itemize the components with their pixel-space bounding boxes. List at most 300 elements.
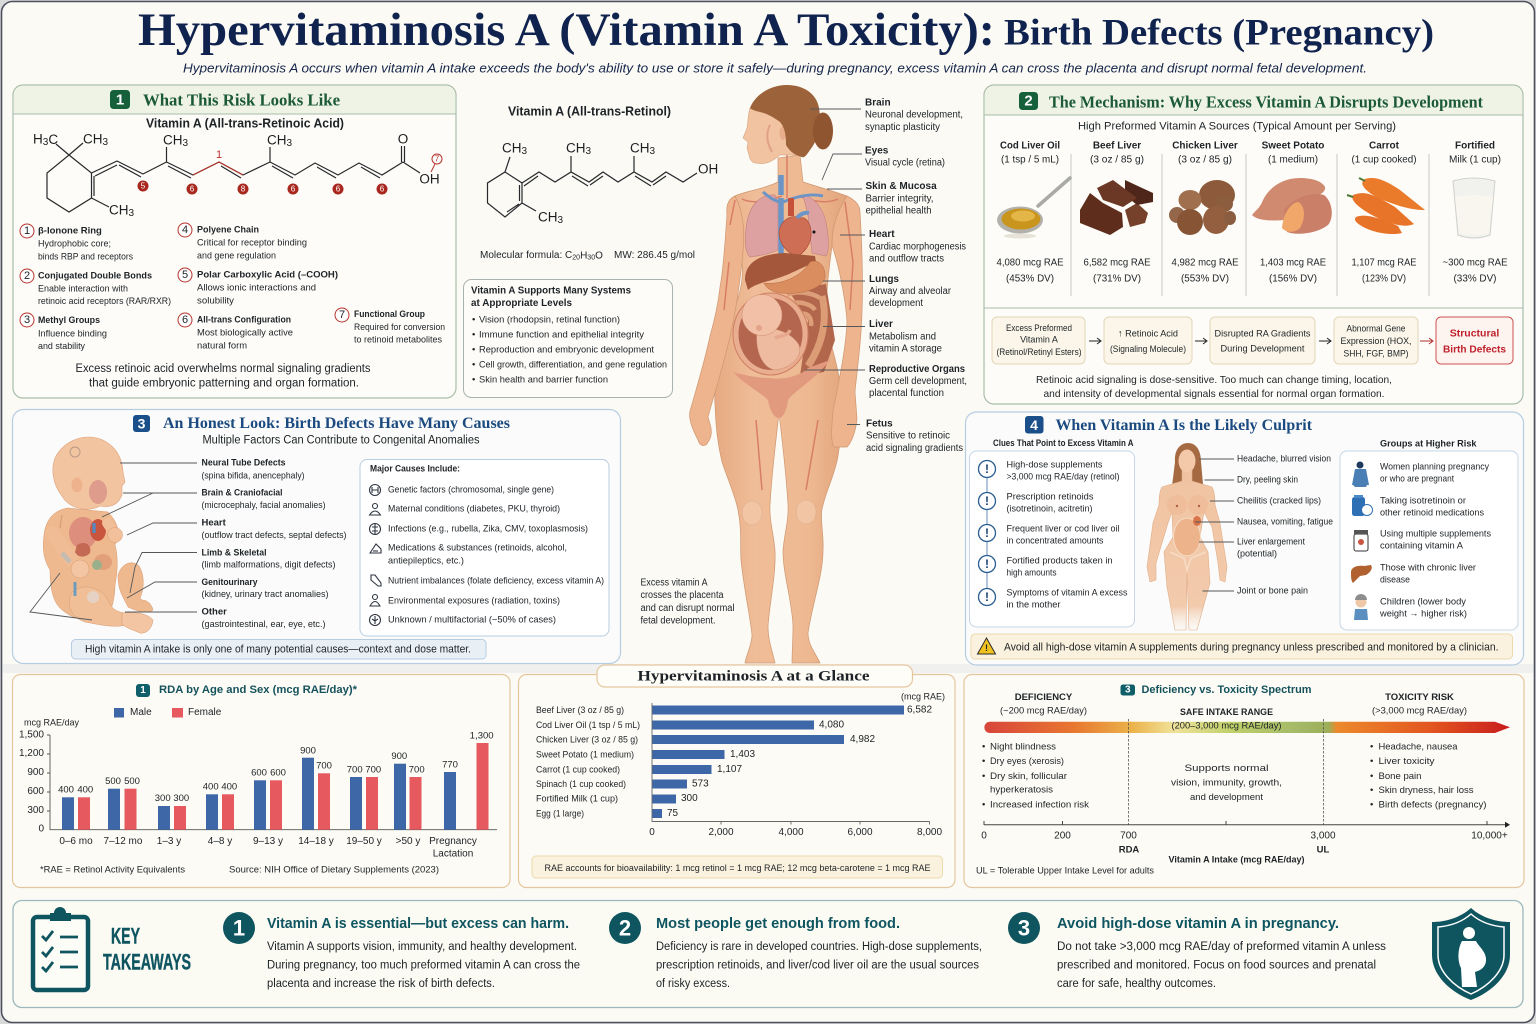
key item 1: Hydrophobic core; bbox=[38, 238, 111, 250]
food: beef liver: 6,582 mcg RAE bbox=[1084, 258, 1151, 268]
label: brain and craniofacial: (microcephaly, facial anomalies) bbox=[202, 500, 326, 511]
panel 3: birth defects have many causes bbox=[12, 410, 620, 664]
key item 5: solubility bbox=[197, 296, 234, 306]
key takeaways label: TAKEAWAYS bbox=[103, 950, 191, 974]
bar value labels: 400 bbox=[221, 782, 237, 792]
retinol structure: OH bbox=[698, 162, 718, 176]
panel: RDA by age and sex chart bbox=[12, 674, 510, 888]
heading: what this risk looks like: What This Risk Looks Like bbox=[143, 90, 340, 110]
label: lungs bbox=[869, 274, 952, 309]
food: carrot: Carrot bbox=[1369, 140, 1400, 152]
food: beef liver: Beef Liver bbox=[1093, 140, 1141, 152]
retinol structure: 3 bbox=[558, 214, 564, 226]
food: chicken liver: (553% DV) bbox=[1181, 274, 1229, 284]
glance axis: 8,000 bbox=[917, 827, 942, 838]
major causes box bbox=[360, 460, 609, 636]
toxicity symptoms: • bbox=[1370, 771, 1373, 782]
food bar values: 1,403 bbox=[730, 749, 755, 760]
flow step 1: Vitamin A bbox=[1020, 334, 1058, 344]
mechanism summary bbox=[1036, 374, 1392, 400]
major causes box: Unknown / multifactorial (~50% of cases) bbox=[388, 614, 556, 626]
glance axis: 4,000 bbox=[778, 827, 804, 838]
panel 4: when vitamin A is the likely culprit bbox=[966, 412, 1524, 665]
badge 1: 1 bbox=[116, 92, 124, 108]
food bar labels: Spinach (1 cup cooked) bbox=[536, 779, 626, 789]
label: heart: Heart bbox=[869, 229, 895, 240]
takeaway 3: prescribed and monitored. Focus on food sources and prenatal bbox=[1057, 960, 1376, 972]
clues box bbox=[970, 451, 1134, 627]
label: neural tube defects: (spina bifida, anencephaly) bbox=[202, 470, 304, 482]
food bar values: 1,107 bbox=[717, 764, 742, 775]
symptom labels bbox=[1237, 454, 1333, 596]
takeaway 3: care for safe, healthy outcomes. bbox=[1057, 978, 1216, 990]
food bar labels: Sweet Potato (1 medium) bbox=[536, 750, 634, 760]
placenta note: fetal development. bbox=[640, 616, 716, 626]
group: women planning pregnancy: or who are pregnant bbox=[1380, 474, 1454, 484]
safe range description: vision, immunity, growth, bbox=[1171, 778, 1282, 788]
key item 5: 5 bbox=[182, 269, 188, 281]
key item 1: β-Ionone Ring bbox=[38, 226, 102, 236]
food: chicken liver: 4,982 mcg RAE bbox=[1172, 258, 1239, 268]
neck and shoulder vessels bbox=[724, 155, 853, 490]
RDA badge bbox=[136, 684, 150, 697]
key item 3: Methyl Groups bbox=[38, 315, 100, 326]
major causes box: Infections (e.g., rubella, Zika, CMV, toxoplasmosis) bbox=[388, 524, 588, 534]
label: heart: Cardiac morphogenesis bbox=[869, 242, 966, 252]
intake axis: UL bbox=[1317, 844, 1330, 856]
knees bbox=[742, 500, 816, 525]
group: chronic liver disease bbox=[1351, 562, 1476, 586]
food: cod liver oil: (1 tsp / 5 mL) bbox=[1001, 154, 1059, 166]
molecule title: Vitamin A (All-trans-Retinoic Acid) bbox=[146, 116, 344, 130]
group: children bbox=[1354, 594, 1467, 620]
placenta note bbox=[640, 578, 734, 626]
y axis: 900 bbox=[27, 767, 44, 778]
intake axis: 700 bbox=[1120, 830, 1137, 842]
retinoic acid structure: 6 bbox=[190, 184, 195, 194]
food sources subtitle: High Preformed Vitamin A Sources (Typical Amount per Serving) bbox=[1078, 120, 1396, 132]
deficiency symptoms: • bbox=[982, 800, 985, 810]
bar value labels: 700 bbox=[365, 764, 381, 776]
toxicity symptoms: • bbox=[1370, 756, 1373, 767]
key item 4: Polyene Chain bbox=[197, 224, 259, 236]
anatomy leader lines bbox=[805, 109, 865, 424]
label: heart: (outflow tract defects, septal defects) bbox=[202, 530, 346, 541]
food bar labels: Fortified Milk (1 cup) bbox=[536, 794, 618, 804]
food bar values: 573 bbox=[692, 778, 709, 790]
label: liver: vitamin A storage bbox=[869, 344, 942, 354]
food: chicken liver: Chicken Liver bbox=[1172, 140, 1238, 152]
label: brain: Brain bbox=[865, 98, 891, 108]
key item 7 bbox=[335, 308, 445, 346]
glance axis: 6,000 bbox=[847, 827, 873, 838]
food: fortified milk: ~300 mcg RAE bbox=[1442, 258, 1508, 268]
food: fortified milk: Milk (1 cup) bbox=[1449, 154, 1501, 166]
mechanism summary: and intensity of developmental signals essential for normal organ formation. bbox=[1044, 388, 1384, 400]
flow step 4: SHH, FGF, BMP) bbox=[1344, 348, 1408, 360]
key takeaways label bbox=[103, 924, 191, 974]
left arm bbox=[690, 196, 744, 446]
y axis: mcg RAE/day bbox=[24, 718, 80, 728]
label: genitourinary bbox=[202, 577, 328, 600]
deficiency symptoms: hyperkeratosis bbox=[990, 784, 1053, 796]
clue 4 bbox=[978, 556, 1112, 578]
food: carrot: (123% DV) bbox=[1362, 274, 1406, 284]
badge 1 bbox=[110, 90, 130, 109]
key item 4 bbox=[178, 223, 307, 262]
clue 4: high amounts bbox=[1006, 568, 1057, 578]
retinoic acid structure: CH bbox=[83, 132, 102, 146]
retinoic acid structure: CH bbox=[163, 132, 182, 148]
deficiency symptoms: • bbox=[982, 742, 985, 752]
uterus bbox=[733, 293, 808, 375]
deficiency symptoms: • bbox=[982, 771, 985, 782]
category labels: 4–8 y bbox=[208, 836, 232, 847]
key item 2 bbox=[20, 269, 171, 307]
safe range heading: SAFE INTAKE RANGE bbox=[1180, 707, 1273, 718]
toxicity symptoms: Bone pain bbox=[1378, 771, 1422, 782]
food: cod liver oil: (453% DV) bbox=[1006, 274, 1054, 284]
label: eyes bbox=[865, 146, 945, 168]
symptom labels: Headache, blurred vision bbox=[1237, 454, 1331, 464]
supports many systems box: • bbox=[472, 374, 475, 386]
major causes box: Genetic factors (chromosomal, single gene) bbox=[388, 484, 554, 496]
clue 5: in the mother bbox=[1006, 600, 1060, 610]
flow step 1 bbox=[992, 317, 1085, 364]
group: children: Children (lower body bbox=[1380, 596, 1466, 608]
glance axis: 0 bbox=[649, 827, 655, 838]
label: other: (gastrointestinal, ear, eye, etc.) bbox=[202, 619, 326, 630]
key item 6: natural form bbox=[197, 340, 247, 352]
label: liver: Metabolism and bbox=[869, 332, 936, 342]
key item 3: 3 bbox=[24, 314, 30, 326]
intake axis: RDA bbox=[1119, 844, 1139, 856]
group: multiple supplements: containing vitamin A bbox=[1380, 540, 1464, 552]
clues heading: Clues That Point to Excess Vitamin A bbox=[993, 438, 1134, 448]
category labels: 7–12 mo bbox=[104, 836, 143, 847]
right arm bbox=[832, 196, 862, 447]
retinoic acid structure: 3 bbox=[43, 136, 49, 148]
food bar labels: Beef Liver (3 oz / 85 g) bbox=[536, 705, 624, 715]
deficiency symptoms: • bbox=[982, 756, 985, 767]
key item 1 bbox=[20, 224, 133, 262]
group: retinoid medications bbox=[1352, 495, 1484, 518]
mechanism summary: Retinoic acid signaling is dose-sensitive. Too much can change timing, location, bbox=[1036, 374, 1392, 386]
group: chronic liver disease: disease bbox=[1380, 574, 1410, 586]
heading: likely culprit: When Vitamin A Is the Likely Culprit bbox=[1056, 417, 1313, 434]
flow step 4: Abnormal Gene bbox=[1346, 324, 1406, 334]
molecular formula: MW: 286.45 g/mol bbox=[614, 250, 695, 261]
y axis: 0 bbox=[38, 824, 44, 834]
key item 3: Influence binding bbox=[38, 328, 107, 340]
intake axis: 3,000 bbox=[1310, 830, 1336, 842]
intake axis bbox=[981, 821, 1510, 866]
glance axis: 2,000 bbox=[708, 827, 734, 838]
food bar labels: Carrot (1 cup cooked) bbox=[536, 764, 620, 774]
panel 2: the mechanism bbox=[984, 85, 1523, 404]
bar value labels: 770 bbox=[442, 760, 458, 770]
bar value labels: 300 bbox=[155, 793, 171, 804]
icon: shield with pregnant silhouette bbox=[1432, 908, 1510, 1000]
retinoic acid structure: 8 bbox=[241, 184, 246, 194]
retinoic acid structure: 7 bbox=[435, 154, 440, 164]
symptom labels: Cheilitis (cracked lips) bbox=[1237, 496, 1321, 506]
flow arrow bbox=[1420, 338, 1433, 344]
clue 3: ! bbox=[985, 526, 989, 540]
RDA footnotes: *RAE = Retinol Activity Equivalents bbox=[40, 864, 185, 876]
toxicity heading: (>3,000 mcg RAE/day) bbox=[1372, 706, 1467, 716]
label: fetus: Sensitive to retinoic bbox=[866, 430, 950, 442]
RDA heading: RDA by Age and Sex (mcg RAE/day)* bbox=[159, 684, 358, 696]
molecular formula: O bbox=[595, 250, 603, 261]
bar value labels: 600 bbox=[251, 768, 267, 778]
key item 7: to retinoid metabolites bbox=[354, 334, 442, 346]
group: chronic liver disease: Those with chronic liver bbox=[1380, 562, 1476, 574]
deficiency symptoms: Increased infection risk bbox=[990, 800, 1089, 810]
label: heart bbox=[869, 229, 966, 264]
y axis bbox=[19, 718, 497, 834]
group: children: weight → higher risk) bbox=[1379, 608, 1467, 620]
context callout bbox=[72, 640, 486, 659]
label: brain and craniofacial: Brain & Craniofacial bbox=[202, 488, 282, 498]
retinoic acid structure: CH bbox=[109, 202, 128, 218]
RDA footnotes bbox=[40, 864, 439, 876]
key item 2: Conjugated Double Bonds bbox=[38, 270, 152, 282]
retinoic acid structure: OH bbox=[419, 172, 440, 186]
RAE note: RAE accounts for bioavailability: 1 mcg retinol = 1 mcg RAE; 12 mcg beta-carotene = 1 mcg RAE bbox=[544, 863, 930, 873]
title bbox=[138, 4, 1434, 56]
supports many systems box: • bbox=[472, 344, 475, 356]
retinol structure bbox=[488, 140, 718, 226]
clue 1 bbox=[978, 460, 1120, 482]
label: liver bbox=[869, 319, 942, 354]
safe range description: and development bbox=[1190, 792, 1263, 803]
title: Birth Defects (Pregnancy) bbox=[1004, 12, 1434, 54]
food: carrot bbox=[1347, 140, 1425, 284]
retinoic acid structure: 3 bbox=[286, 138, 292, 148]
safe range description: Supports normal bbox=[1184, 763, 1268, 774]
symptom labels: (potential) bbox=[1237, 548, 1277, 560]
symptom labels: Nausea, vomiting, fatigue bbox=[1237, 516, 1333, 528]
retinoic acid structure bbox=[33, 132, 442, 218]
symptom labels: Liver enlargement bbox=[1237, 536, 1305, 548]
retinol structure: 3 bbox=[522, 146, 528, 156]
spectrum gradient bar: (200–3,000 mcg RAE/day) bbox=[1172, 720, 1282, 732]
bar value labels: 700 bbox=[347, 764, 363, 776]
group: women planning pregnancy bbox=[1352, 462, 1489, 487]
deficiency symptoms bbox=[982, 742, 1089, 810]
label: genitourinary: Genitourinary bbox=[202, 577, 258, 588]
label: brain bbox=[865, 98, 963, 133]
key item 5 bbox=[178, 268, 338, 306]
placenta note: Excess vitamin A bbox=[640, 578, 708, 588]
retinoic acid structure: 6 bbox=[380, 184, 385, 194]
flow arrow bbox=[1195, 338, 1207, 344]
toxicity symptoms: Liver toxicity bbox=[1378, 756, 1435, 767]
deficiency heading bbox=[1000, 692, 1087, 716]
glance title tab bbox=[597, 665, 912, 687]
label: liver: Liver bbox=[869, 319, 893, 330]
heading: honest look: An Honest Look: Birth Defects Have Many Causes bbox=[163, 415, 510, 432]
takeaway 1 bbox=[223, 912, 580, 990]
supports many systems box: • bbox=[472, 360, 475, 370]
spectrum gradient bar bbox=[984, 720, 1510, 733]
badge 3: 3 bbox=[138, 416, 146, 432]
takeaway 3: 3 bbox=[1018, 916, 1030, 940]
flow step 3: Disrupted RA Gradients bbox=[1214, 328, 1311, 340]
clue 1: ! bbox=[985, 462, 989, 476]
retinol structure: 3 bbox=[586, 146, 592, 156]
label: lungs: Airway and alveolar bbox=[869, 286, 952, 297]
clue 4: Fortified products taken in bbox=[1006, 556, 1112, 566]
spectrum badge: 3 bbox=[1125, 684, 1131, 696]
spectrum heading: Deficiency vs. Toxicity Spectrum bbox=[1142, 684, 1312, 696]
intake axis: 0 bbox=[981, 830, 987, 842]
symptom labels: Dry, peeling skin bbox=[1237, 474, 1298, 486]
label: brain: Neuronal development, bbox=[865, 110, 963, 120]
major causes box: Maternal conditions (diabetes, PKU, thyroid) bbox=[388, 504, 560, 514]
food bar values: 300 bbox=[681, 793, 698, 804]
retinoic acid structure: 1 bbox=[216, 149, 222, 161]
supports many systems box: Immune function and epithelial integrity bbox=[479, 330, 644, 340]
badge 4: 4 bbox=[1030, 417, 1038, 433]
food bar values: 75 bbox=[667, 808, 679, 819]
toxicity symptoms: • bbox=[1370, 742, 1373, 752]
liver bbox=[745, 253, 816, 290]
food: carrot: 1,107 mcg RAE bbox=[1352, 258, 1417, 268]
key item 4: 4 bbox=[182, 224, 188, 236]
food: sweet potato: 1,403 mcg RAE bbox=[1260, 258, 1326, 268]
molecular formula: H bbox=[580, 250, 587, 261]
flow step 4 bbox=[1334, 317, 1418, 364]
label: neural tube defects: Neural Tube Defects bbox=[202, 458, 286, 468]
major causes box: Nutrient imbalances (folate deficiency, excess vitamin A) bbox=[388, 576, 604, 586]
label: lungs: development bbox=[869, 298, 923, 309]
label: other: Other bbox=[202, 606, 227, 618]
toxicity symptoms: Birth defects (pregnancy) bbox=[1378, 800, 1486, 810]
retinoic acid structure: 3 bbox=[102, 136, 108, 148]
flow arrow bbox=[1089, 338, 1101, 344]
food: sweet potato: (1 medium) bbox=[1268, 154, 1318, 166]
retinoic acid structure: O bbox=[398, 132, 408, 146]
category labels: 14–18 y bbox=[298, 836, 334, 847]
pelvis and reproductive organs bbox=[733, 360, 830, 418]
category labels: 1–3 y bbox=[157, 836, 181, 847]
key item 6 bbox=[178, 313, 293, 352]
UL footnote: UL = Tolerable Upper Intake Level for adults bbox=[976, 866, 1154, 876]
food bar labels: Chicken Liver (3 oz / 85 g) bbox=[536, 734, 638, 744]
clue 5 bbox=[978, 588, 1128, 610]
panel: key takeaways bbox=[13, 900, 1523, 1008]
symptom leader lines bbox=[1195, 459, 1234, 591]
intake axis: 10,000+ bbox=[1471, 830, 1508, 842]
molecular formula: 20 bbox=[572, 254, 580, 261]
flow step 2 bbox=[1104, 317, 1192, 364]
group: retinoid medications: Taking isotretinoin or bbox=[1380, 496, 1466, 506]
clue 5: ! bbox=[985, 590, 989, 604]
toxicity heading bbox=[1372, 692, 1467, 716]
groups heading: Groups at Higher Risk bbox=[1380, 438, 1477, 450]
icon: clipboard checklist bbox=[33, 907, 88, 990]
retinol structure: CH bbox=[502, 140, 522, 156]
food: sweet potato: Sweet Potato bbox=[1262, 140, 1324, 152]
major causes box: Major Causes Include: bbox=[370, 464, 460, 474]
retinol molecule block bbox=[464, 104, 718, 398]
RDA legend: Female bbox=[188, 707, 222, 718]
food: fortified milk bbox=[1442, 140, 1508, 284]
clue 1: High-dose supplements bbox=[1006, 460, 1103, 470]
takeaway 2 bbox=[609, 912, 982, 990]
central pregnant woman anatomy figure bbox=[690, 85, 862, 663]
food: beef liver: (731% DV) bbox=[1093, 274, 1141, 284]
takeaway 3: Avoid high-dose vitamin A in pregnancy. bbox=[1057, 915, 1339, 932]
label: limb and skeletal: Limb & Skeletal bbox=[202, 548, 266, 558]
key item 7: Required for conversion bbox=[354, 322, 445, 333]
bar value labels: 500 bbox=[105, 776, 121, 787]
deficiency heading: (~200 mcg RAE/day) bbox=[1000, 706, 1087, 716]
panel 1 summary bbox=[76, 363, 371, 390]
intestines bbox=[787, 284, 835, 376]
y axis: 600 bbox=[27, 786, 44, 797]
toxicity symptoms: • bbox=[1370, 785, 1373, 796]
retinoic acid structure: 3 bbox=[182, 138, 188, 148]
takeaway 1: During pregnancy, too much preformed vitamin A can cross the bbox=[267, 960, 580, 972]
RDA legend: Male bbox=[130, 707, 152, 718]
key item 2: 2 bbox=[24, 270, 30, 282]
retinoic acid structure: CH bbox=[267, 132, 286, 148]
clue 4: ! bbox=[985, 557, 989, 571]
key item 6: Most biologically active bbox=[197, 328, 293, 338]
placenta note: and can disrupt normal bbox=[640, 603, 734, 614]
intake axis: Vitamin A Intake (mcg RAE/day) bbox=[1168, 854, 1304, 866]
retinol structure: CH bbox=[630, 140, 650, 156]
deficiency symptoms: Night blindness bbox=[990, 742, 1056, 752]
female bars bbox=[78, 743, 488, 830]
takeaway 1: Vitamin A supports vision, immunity, and healthy development. bbox=[267, 941, 577, 953]
category labels bbox=[59, 836, 477, 860]
key item 7: 7 bbox=[339, 309, 345, 321]
baby leader lines bbox=[30, 463, 197, 620]
flow step 1: Excess Preformed bbox=[1006, 323, 1072, 333]
panel 1: what this risk looks like bbox=[13, 85, 456, 398]
y axis: 300 bbox=[27, 805, 44, 816]
group: retinoid medications: other retinoid medications bbox=[1380, 508, 1484, 518]
molecular formula: 30 bbox=[587, 254, 595, 261]
baby illustration with organ anatomy bbox=[43, 430, 153, 633]
key item 5: Allows ionic interactions and bbox=[197, 282, 316, 294]
food: chicken liver: (3 oz / 85 g) bbox=[1178, 154, 1232, 166]
label: fetus: acid signaling gradients bbox=[866, 443, 963, 454]
label: fetus: Fetus bbox=[866, 418, 893, 430]
RDA badge: 1 bbox=[140, 685, 146, 696]
label: eyes: Eyes bbox=[865, 146, 889, 156]
label: reproductive organs: Germ cell development, bbox=[869, 376, 967, 387]
title: Hypervitaminosis A (Vitamin A Toxicity): bbox=[138, 4, 995, 56]
flow step 2: (Signaling Molecule) bbox=[1110, 344, 1186, 354]
groups at higher risk box bbox=[1340, 451, 1518, 630]
head and hair bbox=[743, 85, 833, 164]
flow outcome: structural birth defects: Birth Defects bbox=[1443, 344, 1506, 356]
label: skin and mucosa: epithelial health bbox=[866, 206, 932, 216]
label: fetus bbox=[866, 418, 963, 454]
group: multiple supplements: Using multiple supplements bbox=[1380, 528, 1491, 540]
label: heart bbox=[202, 518, 346, 541]
bar value labels: 400 bbox=[58, 784, 74, 796]
food: sweet potato bbox=[1252, 140, 1332, 284]
intake axis: 200 bbox=[1054, 830, 1071, 842]
clue 2: (isotretinoin, acitretin) bbox=[1006, 504, 1092, 514]
retinoic acid structure: 6 bbox=[291, 184, 296, 194]
